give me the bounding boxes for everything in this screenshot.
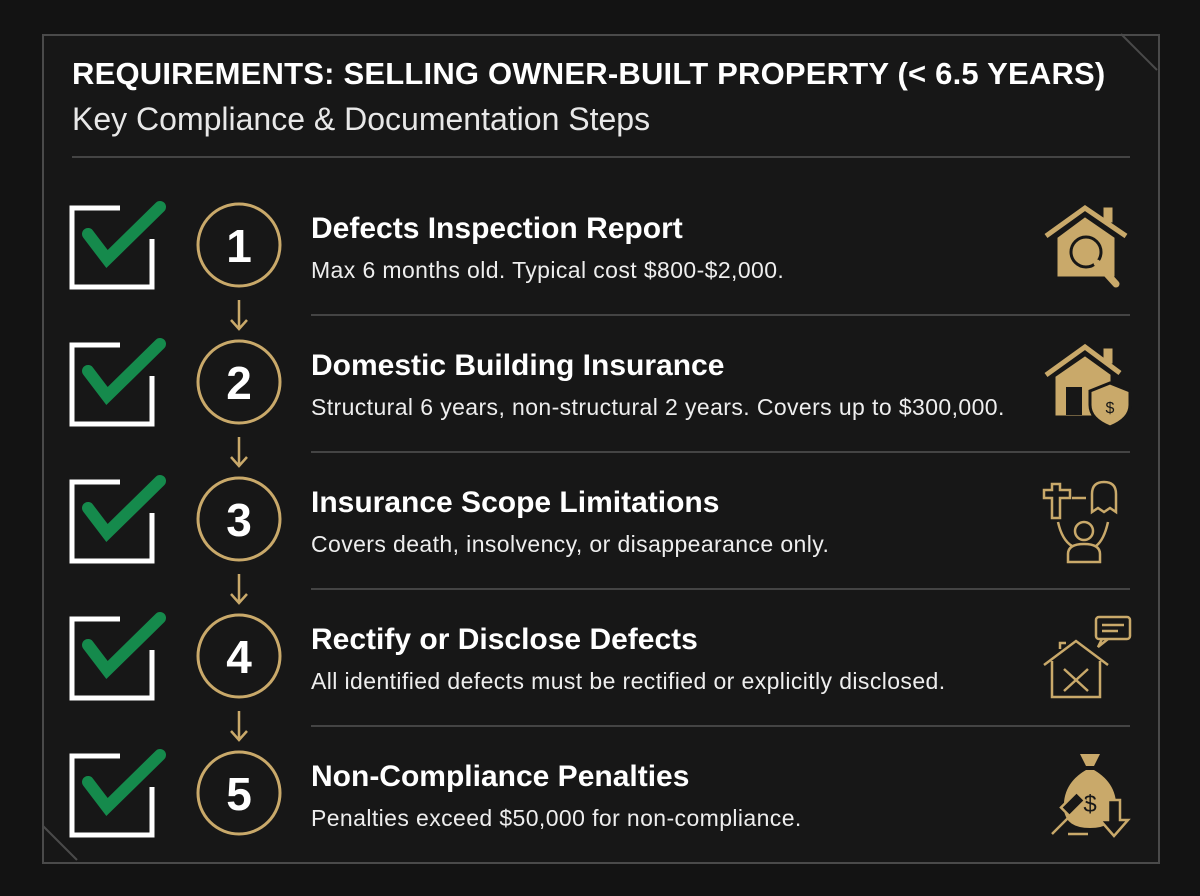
heading 1: Defects Inspection Report (311, 212, 683, 245)
desc 4: All identified defects must be rectified or explicitly disclosed. (311, 668, 946, 694)
icon: money bag gavel: $ (1083, 791, 1097, 818)
icon: house shield: $ (1106, 400, 1115, 417)
heading 4: Rectify or Disclose Defects (311, 623, 698, 656)
desc 5: Penalties exceed $50,000 for non-compliance. (311, 805, 802, 831)
heading 5: Non-Compliance Penalties (311, 760, 689, 793)
checkbox 2 (70, 338, 166, 426)
number circle 3 (196, 476, 282, 562)
number circle 4 (196, 614, 282, 698)
icon: house shield (1044, 344, 1128, 426)
checkbox 5 (70, 749, 166, 838)
icon: house magnifier (1044, 205, 1128, 288)
checkbox 4 (70, 612, 166, 700)
checkbox 1 (70, 201, 166, 290)
number circle 2: 2 (226, 357, 252, 409)
step 3 (70, 475, 1118, 564)
icon: house tools speech (1043, 616, 1132, 698)
step 2 (70, 338, 1128, 426)
step 1 (70, 201, 1128, 290)
heading 3: Insurance Scope Limitations (311, 486, 719, 519)
number circle 5 (196, 750, 282, 836)
desc 2: Structural 6 years, non-structural 2 years. Covers up to $300,000. (311, 394, 1005, 420)
title: REQUIREMENTS: SELLING OWNER-BUILT PROPERTY (< 6.5 YEARS) (72, 56, 1105, 91)
heading 2: Domestic Building Insurance (311, 349, 724, 382)
number circle 2 (196, 340, 282, 424)
subtitle: Key Compliance & Documentation Steps (72, 101, 650, 137)
desc 3: Covers death, insolvency, or disappearance only. (311, 531, 829, 557)
step 5 (70, 749, 1131, 838)
desc 1: Max 6 months old. Typical cost $800-$2,000. (311, 257, 784, 283)
checkbox 3 (70, 475, 166, 564)
step 4 (70, 612, 1132, 700)
number circle 1 (196, 202, 282, 288)
number circle 1: 1 (226, 220, 252, 272)
number circle 4: 4 (226, 631, 252, 683)
icon: money bag gavel (1051, 754, 1131, 838)
number circle 3: 3 (226, 494, 252, 546)
number circle 5: 5 (226, 768, 252, 820)
icon: cross ghost person (1042, 480, 1118, 564)
